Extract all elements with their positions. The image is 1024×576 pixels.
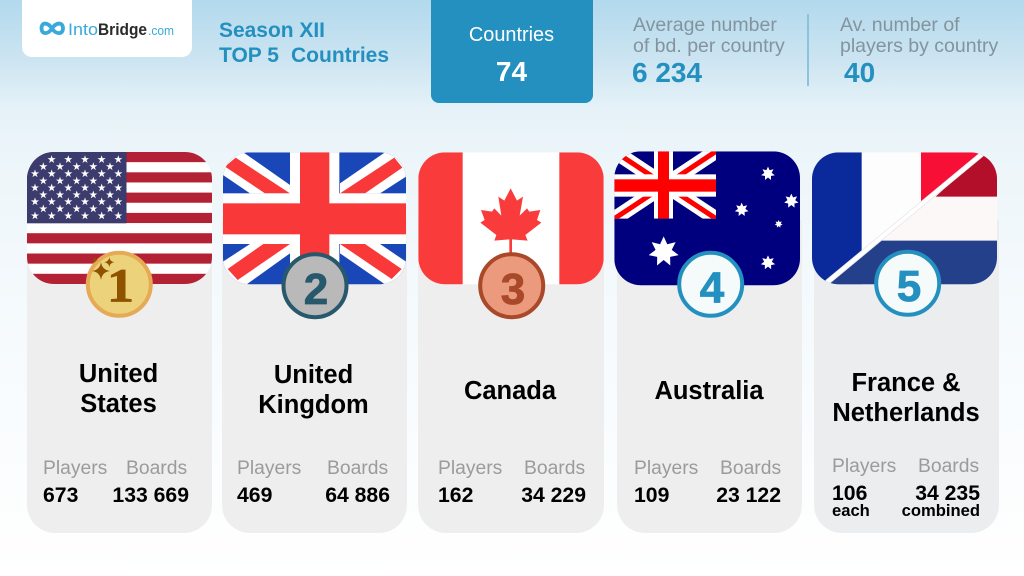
medal 4 <box>679 253 742 316</box>
stats: Players <box>438 458 502 479</box>
card: Australia <box>614 151 802 533</box>
stats: 34 235 <box>915 482 980 505</box>
stats: Boards <box>524 458 585 479</box>
stat: average players by country <box>840 14 998 88</box>
flag: Australia <box>614 151 800 285</box>
panel: countries count <box>431 0 593 103</box>
stats <box>43 458 189 507</box>
card background <box>418 220 604 533</box>
country name <box>832 369 980 427</box>
stats <box>237 458 390 507</box>
card: Canada <box>418 152 604 533</box>
country name <box>258 361 369 419</box>
medal 2 <box>284 254 346 317</box>
stat: average boards per country <box>632 14 785 88</box>
stats: Players <box>832 456 896 477</box>
stats: 64 886 <box>325 484 390 507</box>
stats <box>634 458 781 507</box>
icon: infinity logo mark <box>42 24 63 33</box>
heading: season title <box>219 19 389 67</box>
stats: Boards <box>126 458 187 479</box>
country name: Netherlands <box>832 399 980 427</box>
card: United Kingdom <box>222 152 407 533</box>
stats <box>438 458 586 507</box>
card background <box>814 220 999 533</box>
stats: 162 <box>438 484 473 507</box>
card background <box>27 220 212 533</box>
card: United States <box>27 152 212 533</box>
stat: average boards per country: 6 234 <box>632 57 702 88</box>
flag: United States <box>27 152 212 284</box>
panel: countries count: Countries <box>469 24 554 46</box>
medal 1 <box>88 253 151 316</box>
logo wordmark: Into <box>68 21 98 39</box>
stats: 469 <box>237 484 272 507</box>
medal 5: 5 <box>897 262 921 311</box>
medal 3: 3 <box>501 265 525 314</box>
country name: Canada <box>464 377 557 405</box>
medal 4: 4 <box>700 263 725 312</box>
card background <box>222 220 407 533</box>
heading: season title: Countries <box>291 44 389 67</box>
stats: Boards <box>720 458 781 479</box>
stats: Boards <box>918 456 979 477</box>
heading: season title: Season XII <box>219 19 325 42</box>
flag: France and Netherlands <box>812 152 997 284</box>
stats: Boards <box>327 458 388 479</box>
logo wordmark: Bridge <box>98 21 147 39</box>
stat: average players by country: Av. number of <box>840 14 960 36</box>
stats: 109 <box>634 484 669 507</box>
stats: 673 <box>43 484 79 507</box>
stat: average boards per country: Average number <box>633 14 777 36</box>
icon: sparkles <box>92 257 114 280</box>
medal 3 <box>480 254 543 317</box>
stat: average players by country: 40 <box>844 57 875 88</box>
medal 2: 2 <box>304 265 328 314</box>
logo panel <box>22 0 192 57</box>
stats: 23 122 <box>716 484 781 507</box>
flag: United Kingdom <box>223 152 406 284</box>
country name: Australia <box>654 377 764 405</box>
stats: Players <box>43 458 107 479</box>
country name: United <box>274 361 353 389</box>
flag: Canada <box>418 152 604 284</box>
medal 1: 1 <box>107 260 134 313</box>
stat: average players by country: players by country <box>840 35 998 57</box>
card background <box>617 220 802 533</box>
country name: France & <box>851 369 961 397</box>
stats: 133 669 <box>112 484 189 507</box>
stat: average boards per country: of bd. per country <box>633 35 785 57</box>
country name: States <box>80 390 157 418</box>
country name <box>79 360 158 418</box>
stats: 106 <box>832 482 868 505</box>
panel: countries count: 74 <box>496 56 527 87</box>
card: France and Netherlands <box>812 152 999 533</box>
logo wordmark <box>68 21 174 39</box>
stats: 34 229 <box>521 484 586 507</box>
stats: each <box>832 501 870 520</box>
logo wordmark: .com <box>148 23 174 38</box>
country name: Kingdom <box>258 391 369 419</box>
stats: Players <box>237 458 301 479</box>
stats: combined <box>902 501 980 520</box>
country name: United <box>79 360 158 388</box>
stats: Players <box>634 458 698 479</box>
medal 5 <box>876 252 939 315</box>
stats <box>832 456 980 520</box>
heading: season title: TOP 5 <box>219 44 279 67</box>
